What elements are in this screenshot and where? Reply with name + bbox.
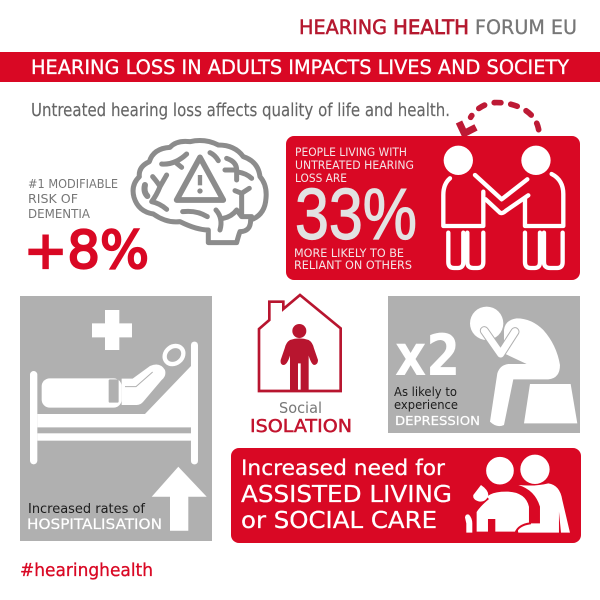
text: people living with untreated hearing loss <box>295 145 414 185</box>
text: increased rates of hospitalisation: HOSPITALISATION <box>27 517 162 533</box>
text: more likely to be reliant on others <box>294 246 412 272</box>
text: people living with untreated hearing loss: PEOPLE LIVING WITH <box>295 145 407 159</box>
text: people living with untreated hearing loss: LOSS ARE <box>295 171 347 185</box>
text: increased rates of hospitalisation: Increased rates of <box>28 501 146 517</box>
text: as likely to experience depression: DEPRESSION <box>395 413 480 428</box>
panel: hospitalisation <box>20 296 212 541</box>
text: increased need for assisted living or social care: or SOCIAL CARE <box>241 506 437 534</box>
big number: x2: x2 <box>395 323 460 389</box>
stat: dementia risk: DEMENTIA <box>28 207 91 221</box>
text: people living with untreated hearing loss: UNTREATED HEARING <box>295 158 414 172</box>
stat: dementia risk: +8% <box>24 221 149 281</box>
icon: brain with warning triangle <box>133 141 266 243</box>
logo heading: Hearing Health Forum EU <box>299 16 577 39</box>
title banner <box>0 52 600 82</box>
icon: up arrow <box>152 467 207 531</box>
icon: seated person with head in hands <box>470 307 577 426</box>
text: as likely to experience depression: experience <box>394 397 458 412</box>
icon: two people shaking hands <box>443 146 563 268</box>
subtitle: Untreated hearing loss affects quality of life and health. <box>31 101 450 121</box>
text: as likely to experience depression <box>394 384 480 428</box>
logo heading: Hearing Health Forum EU: HEALTH <box>393 16 469 39</box>
text: increased need for assisted living or social care <box>241 456 452 534</box>
arrow: dashed curved arrow between people <box>459 103 539 133</box>
panel: reliance on others <box>286 136 580 280</box>
icon: carer supporting an elderly person <box>465 455 570 533</box>
panel: depression <box>388 296 580 433</box>
logo heading: Hearing Health Forum EU: HEARING <box>299 16 387 39</box>
icon: medical cross, bed and patient <box>30 310 198 464</box>
stat: dementia risk: RISK OF <box>28 192 78 206</box>
icon: person inside a house <box>259 295 341 391</box>
big number: 33%: 33% <box>295 175 417 255</box>
text: more likely to be reliant on others: RELIANT ON OTHERS <box>294 258 412 272</box>
text: social isolation: ISOLATION <box>250 416 352 437</box>
stat: dementia risk: #1 MODIFIABLE <box>28 177 118 191</box>
title banner: HEARING LOSS IN ADULTS IMPACTS LIVES AND SOCIETY <box>31 56 569 79</box>
text: more likely to be reliant on others: MORE LIKELY TO BE <box>294 246 404 260</box>
text: increased need for assisted living or social care: Increased need for <box>241 456 445 481</box>
text: social isolation <box>250 399 352 437</box>
text: as likely to experience depression: As likely to <box>394 384 457 399</box>
panel: assisted living or social care <box>231 448 581 543</box>
text: increased need for assisted living or social care: ASSISTED LIVING <box>241 480 452 508</box>
hashtag: #hearinghealth <box>20 561 153 581</box>
panel: social isolation <box>250 295 352 437</box>
text: increased rates of hospitalisation <box>27 501 162 533</box>
text: social isolation: Social <box>279 399 322 417</box>
stat: dementia risk <box>24 177 149 281</box>
logo heading: Hearing Health Forum EU: FORUM EU <box>475 16 577 39</box>
